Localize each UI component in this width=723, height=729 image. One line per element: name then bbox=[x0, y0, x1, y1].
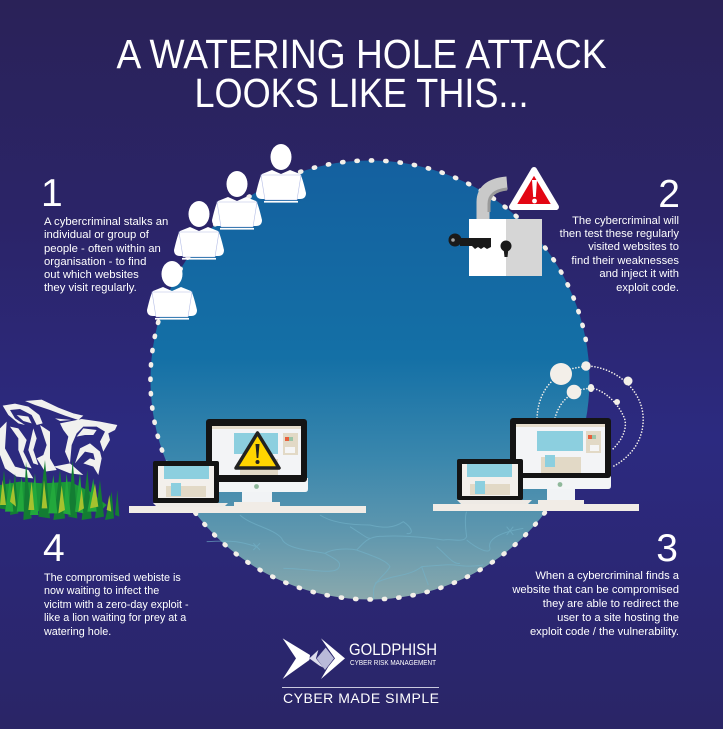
step 2 text: 2 bbox=[658, 173, 680, 216]
step 1 text: organisation - to find bbox=[44, 256, 146, 268]
icon: network nodes bbox=[537, 361, 643, 467]
icon: people at laptops bbox=[147, 144, 306, 320]
logo: Goldphish: GOLDPHISH bbox=[349, 641, 437, 659]
right computers bbox=[433, 418, 639, 511]
logo: Goldphish: CYBER RISK MANAGEMENT bbox=[350, 660, 437, 667]
shelf bbox=[433, 504, 639, 511]
step 2 text bbox=[560, 173, 680, 294]
step 1 text: 1 bbox=[41, 172, 63, 215]
icon: grass bbox=[0, 460, 119, 520]
step 3 text: user to a site hosting the bbox=[557, 612, 679, 624]
icon: fish mark bbox=[283, 638, 345, 679]
shelf bbox=[129, 506, 366, 513]
step 3 text: they are able to redirect the bbox=[543, 598, 679, 610]
icon: red warning triangle bbox=[512, 170, 556, 207]
step 4 text: like a lion waiting for prey at a bbox=[44, 612, 186, 624]
step 1 text: they visit regularly. bbox=[44, 282, 137, 294]
step 3 text: When a cybercriminal finds a bbox=[535, 570, 680, 582]
step 2 text: The cybercriminal will bbox=[572, 215, 679, 227]
step 4 text: now waiting to infect the bbox=[44, 585, 159, 597]
logo: Goldphish: CYBER MADE SIMPLE bbox=[283, 690, 439, 706]
step 1 text: out which websites bbox=[44, 269, 139, 281]
step 3 text: exploit code / the vulnerability. bbox=[530, 626, 679, 638]
step 2 text: and inject it with bbox=[599, 268, 679, 280]
icon: padlock and key bbox=[448, 183, 542, 276]
logo: Goldphish bbox=[282, 638, 439, 706]
step 1 text: A cybercriminal stalks an bbox=[44, 216, 168, 228]
left computers with warning bbox=[129, 419, 366, 513]
step 3 text: 3 bbox=[656, 527, 678, 570]
laptop bbox=[153, 461, 228, 507]
step 2 text: visited websites to bbox=[588, 241, 679, 253]
title: A WATERING HOLE ATTACK bbox=[116, 31, 606, 77]
watering hole circle bbox=[150, 160, 590, 600]
monitor bbox=[206, 419, 308, 506]
title bbox=[116, 31, 606, 116]
step 1 text: people - often within an bbox=[44, 243, 161, 255]
step 2 text: find their weaknesses bbox=[571, 255, 679, 267]
step 3 text bbox=[511, 527, 680, 638]
icon: yellow warning triangle bbox=[236, 433, 279, 468]
laptop bbox=[457, 459, 532, 504]
step 4 text bbox=[43, 527, 189, 638]
step 2 text: exploit code. bbox=[616, 282, 679, 294]
title: LOOKS LIKE THIS... bbox=[194, 70, 528, 116]
step 3 text: website that can be compromised bbox=[511, 584, 679, 596]
icon: tiger head bbox=[0, 400, 117, 478]
step 1 text bbox=[41, 172, 168, 294]
step 2 text: then test these regularly bbox=[560, 228, 679, 240]
monitor bbox=[510, 418, 611, 504]
step 1 text: individual or group of bbox=[44, 229, 150, 241]
step 4 text: The compromised webiste is bbox=[44, 572, 181, 584]
step 4 text: 4 bbox=[43, 527, 65, 570]
step 4 text: vicitm with a zero-day exploit - bbox=[44, 599, 189, 611]
step 4 text: watering hole. bbox=[43, 626, 111, 638]
